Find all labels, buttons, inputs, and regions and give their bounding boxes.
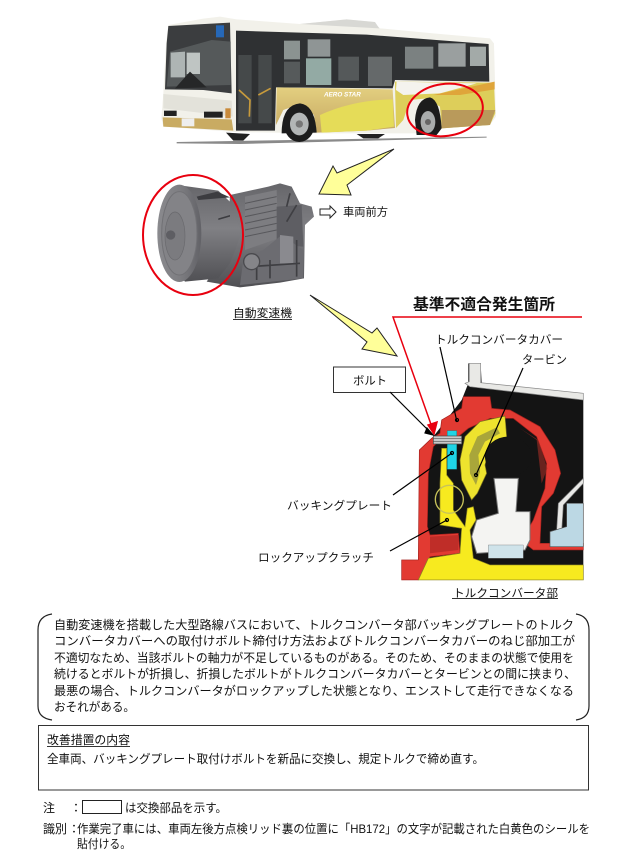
label box: bolt — [334, 367, 406, 392]
bus photo — [161, 17, 496, 144]
note: identification: 作業完了車には、車両左後方点検リッド裏の位置に「HB172」の文字が記載された白黄色のシールを — [77, 821, 590, 836]
note: identification: 識別 — [43, 822, 67, 836]
panel: defect description — [38, 614, 589, 720]
note: replacement parts legend: 注 — [43, 801, 55, 815]
label: torque converter section: トルクコンバータ部 — [453, 587, 559, 600]
label: vehicle front: 車両前方 — [343, 204, 388, 218]
note: replacement parts legend: は交換部品を示す。 — [125, 801, 227, 815]
red callout line — [393, 317, 582, 434]
red circle around rear wheel — [404, 79, 486, 141]
panel: defect description: 続けるとボルトが折損し、折損したボルトがトルクコンバータカバーとタービンとの間に挟まり、 — [54, 666, 576, 681]
hollow arrow: vehicle front — [320, 206, 336, 218]
panel: defect description: コンバータカバーへの取付けボルト締付け方法およびトルクコンバータカバーのねじ部加工が — [54, 633, 575, 648]
note: replacement parts legend — [43, 800, 227, 815]
heading: non-conformity location: 基準不適合発生箇所 — [413, 294, 555, 314]
arrow: bus to transmission — [319, 149, 394, 195]
bus photo: AERO STAR — [323, 92, 361, 99]
panel: corrective measures — [38, 726, 588, 790]
label: torque converter cover: トルクコンバータカバー — [435, 334, 563, 346]
label box: bolt: ボルト — [353, 374, 387, 388]
note: replacement parts legend: ： — [70, 801, 82, 815]
arrow: transmission to detail — [310, 295, 397, 356]
label: lock-up clutch: ロックアップクラッチ — [258, 552, 374, 564]
torque converter cross-section — [402, 363, 583, 580]
label: turbine: タービン — [522, 354, 567, 366]
panel: defect description: 最悪の場合、トルクコンバータがロックアップした状態となり、エンストして走行できなくなる — [54, 683, 574, 698]
panel: corrective measures: 全車両、バッキングプレート取付けボルトを新品に交換し、規定トルクで締め直す。 — [47, 751, 484, 766]
panel: corrective measures: 改善措置の内容 — [47, 732, 130, 747]
label: backing plate: バッキングプレート — [287, 498, 392, 512]
note: identification: 貼付ける。 — [77, 836, 131, 851]
panel: defect description: 不適切なため、当該ボルトの軸力が不足しているものがある。そのため、そのままの状態で使用を — [54, 650, 574, 665]
transmission illustration — [157, 183, 314, 287]
label: automatic transmission: 自動変速機 — [233, 306, 293, 320]
red circle around torque converter — [143, 175, 243, 295]
panel: defect description: おそれがある。 — [54, 699, 135, 714]
leader lines — [390, 347, 523, 551]
note: identification: ： — [68, 822, 80, 836]
note: identification — [43, 821, 590, 851]
panel: defect description: 自動変速機を搭載した大型路線バスにおいて、トルクコンバータ部バッキングプレートのトルク — [54, 617, 574, 632]
